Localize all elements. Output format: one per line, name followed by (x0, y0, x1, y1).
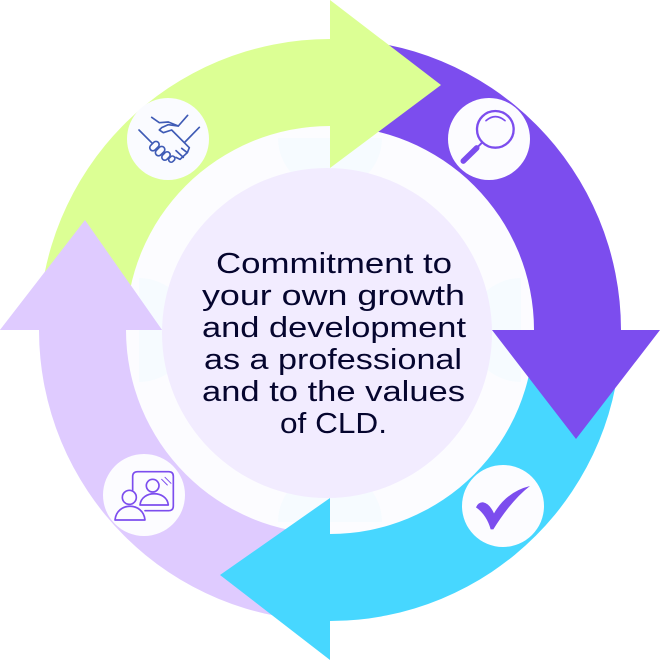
center text (202, 248, 466, 440)
arrow: cyan (220, 330, 621, 660)
center text: of CLD. (280, 408, 387, 440)
icon: people on screen (103, 454, 185, 536)
arrow: lilac head (0, 220, 162, 330)
faint petal shapes (139, 138, 521, 522)
center text: as a professional (204, 344, 462, 376)
center text: and to the values (202, 376, 465, 408)
icon: magnifying glass (448, 98, 530, 180)
icon: check mark (462, 465, 544, 547)
inner circle (162, 168, 492, 498)
arrow: purple (330, 39, 660, 439)
center text: your own growth (202, 280, 465, 312)
center disc (123, 123, 537, 537)
icon: handshake (127, 98, 209, 180)
arrow: green (39, 0, 441, 330)
arrow: lilac body (0, 220, 330, 621)
center text: Commitment to (216, 248, 452, 280)
center text: and development (202, 312, 466, 344)
